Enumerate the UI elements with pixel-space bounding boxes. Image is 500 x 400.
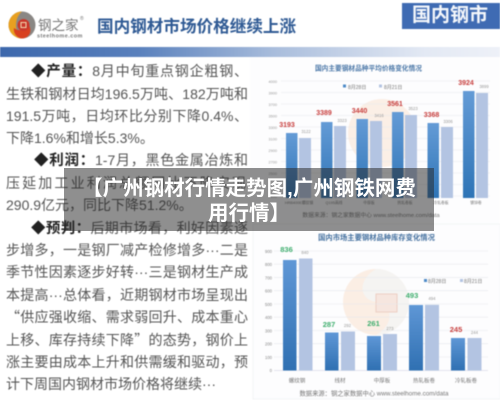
header logo: ®	[80, 15, 84, 22]
text block: analysis: 290.9亿元，同比下降51.2%。	[6, 197, 193, 213]
section tag: 国内钢市	[412, 5, 488, 26]
chart: average price: 3368	[424, 112, 439, 119]
chart: average price: 2700	[269, 160, 277, 164]
chart: inventory: 287	[323, 320, 335, 329]
chart: average price: 3416	[374, 113, 384, 118]
text block: analysis: 本提高···总体看，近期钢材市场呈现出	[6, 287, 248, 303]
header banner strip	[0, 47, 500, 57]
chart: inventory: 836	[280, 245, 293, 254]
chart: inventory: 热轧板卷	[413, 376, 435, 384]
caption overlay: 【广州钢材行情走势图,广州钢铁网费	[82, 177, 416, 200]
chart: average price: 8月28日	[348, 85, 366, 91]
text block: analysis: 上移、库存持续下降”的态势，钢价上	[6, 330, 248, 350]
text block: analysis: 计下周国内钢材市场价格将继续···	[6, 376, 216, 392]
chart: inventory: 0	[270, 368, 273, 373]
chart: average price: 3323	[337, 118, 347, 123]
chart: inventory: 245	[450, 325, 462, 334]
caption overlay: 用行情】	[208, 202, 290, 225]
chart: average price: 3900	[269, 92, 277, 96]
text block: analysis: 季节性因素逐步好转···三是钢材生产成	[6, 264, 248, 280]
chart: average price: HRB400E螺纹钢	[285, 200, 313, 205]
chart: inventory	[253, 224, 500, 399]
title: 国内钢材市场价格继续上涨	[97, 17, 296, 36]
chart: inventory: 700	[265, 276, 273, 280]
chart: inventory: 国内市场主要钢材品种库存变化情况	[318, 233, 436, 242]
chart: average price: 3100	[269, 138, 277, 142]
chart: average price: 冷轧卷板	[433, 200, 449, 205]
chart: inventory: 200	[265, 342, 273, 346]
text block: analysis: 步增多，一是钢厂减产检修增多···二是	[6, 242, 248, 258]
chart: inventory: 244	[471, 330, 479, 335]
text block: analysis: 压延加工业利润总额同比下降实现	[6, 175, 248, 191]
text block: analysis: 涨主要由成本上升和供需缓和驱动，预	[6, 354, 248, 370]
chart: average price: 3300	[269, 126, 277, 130]
chart: average price: 2500	[269, 172, 277, 176]
chart: average price: 8月21日	[384, 85, 402, 91]
chart: average price: 3306	[443, 119, 453, 124]
chart: inventory: 494	[428, 296, 436, 301]
chart: average price: 3440	[352, 108, 367, 115]
header logo: steelhome.com	[37, 34, 83, 40]
text block: analysis: “供应强收缩、需求弱回升、成本重心	[6, 307, 248, 327]
chart: inventory: 493	[406, 291, 418, 300]
chart: inventory: 冷轧板卷	[455, 376, 477, 384]
text block: analysis: ◆利润：1-7月，黑色金属冶炼和	[34, 152, 248, 169]
chart: inventory: 292	[344, 323, 352, 328]
chart: average price: 2300	[269, 184, 277, 188]
text block: analysis	[6, 62, 248, 392]
chart: inventory: 800	[265, 262, 273, 267]
chart: average price: 数据来源：钢之家数据中心 www.steelhome.com/data	[302, 211, 440, 219]
chart: average price: 3924	[458, 80, 474, 87]
text block: analysis: 生铁和钢材日均196.5万吨、182万吨和	[6, 86, 248, 102]
text block: analysis: ◆产量：8月中旬重点钢企粗钢、	[31, 63, 248, 80]
chart: inventory: 线材	[334, 376, 346, 384]
chart: average price: 3193	[279, 122, 295, 129]
chart: inventory: 100	[265, 355, 273, 360]
header logo	[8, 10, 84, 40]
chart: average price: 3122	[301, 129, 311, 134]
chart: inventory: 400	[265, 315, 273, 320]
chart: inventory: 840	[301, 250, 309, 255]
chart: average price: 国内主要钢材品种平均价格变化情况	[315, 64, 422, 72]
chart: average price: 热轧卷板	[397, 200, 413, 205]
chart: average price: 3899	[479, 84, 489, 89]
chart: average price: 3389	[316, 110, 332, 117]
chart: average price	[268, 64, 489, 219]
chart: average price: 3561	[387, 101, 403, 108]
chart: average price: 3523	[408, 106, 418, 111]
chart: average price: 3700	[269, 103, 277, 107]
chart: average price: Q195高线	[326, 200, 343, 205]
section tag	[402, 3, 500, 29]
chart: inventory: 中厚板	[374, 376, 391, 384]
chart: average price: 2100	[269, 195, 277, 199]
chart: average price: 中厚板	[363, 200, 375, 205]
text block: analysis: 191.5万吨，日均环比分别下降0.4%、	[6, 108, 248, 124]
chart: inventory: 8月21日	[464, 279, 482, 285]
text block: analysis: 下降1.6%和增长5.3%。	[6, 130, 154, 146]
caption overlay	[64, 168, 434, 231]
chart: inventory: 600	[265, 288, 273, 294]
chart: inventory: 900	[265, 249, 273, 254]
chart: inventory: 273	[386, 326, 394, 331]
chart: average price: 镀锌卷	[470, 200, 482, 205]
chart: inventory: 8月28日	[428, 279, 446, 285]
chart: average price: 4000	[269, 80, 277, 84]
chart: average price: 2900	[269, 149, 277, 153]
chart: inventory: 261	[367, 319, 380, 328]
chart: inventory: 500	[265, 302, 273, 307]
header logo: 钢之家	[38, 17, 79, 33]
chart: average price: 3500	[269, 114, 277, 118]
chart: inventory: 300	[265, 328, 273, 334]
chart: inventory: 数据来源：钢之家数据中心 www.steelhome.com/data	[299, 388, 449, 398]
text block: analysis: ◆预判：后期市场看，利好因素逐	[31, 220, 248, 237]
chart: inventory: 螺纹钢	[289, 376, 306, 384]
